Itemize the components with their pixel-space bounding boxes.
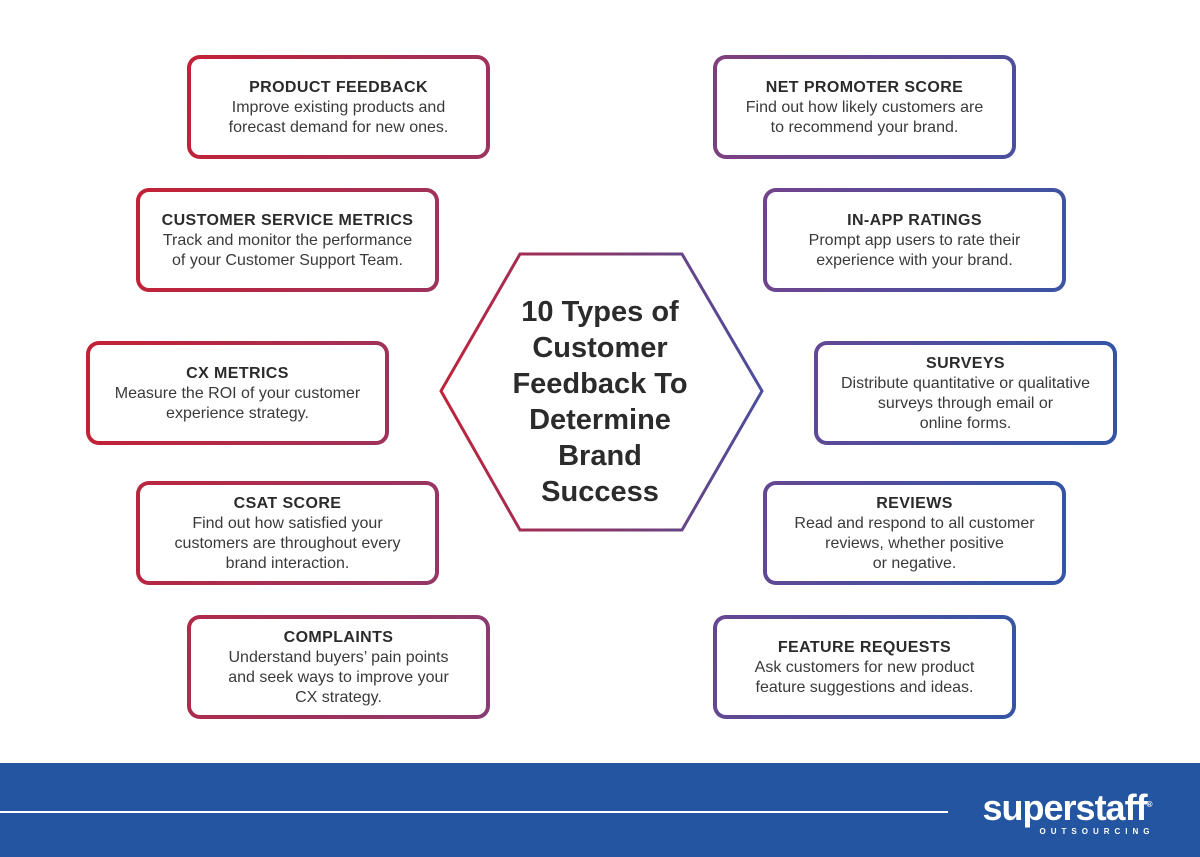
- panel: surveys: SURVEYS: [926, 355, 1005, 372]
- panel: customer service metrics: of your Customer Support Team.: [172, 252, 403, 269]
- panel: net promoter score: to recommend your brand.: [771, 119, 958, 136]
- panel: cx metrics: experience strategy.: [166, 405, 309, 422]
- panel: csat score: customers are throughout every: [175, 535, 400, 552]
- panel: product feedback: PRODUCT FEEDBACK: [249, 79, 428, 96]
- panel: cx metrics: [86, 341, 389, 445]
- panel: product feedback: [187, 55, 490, 159]
- panel: surveys: online forms.: [920, 415, 1011, 432]
- panel: net promoter score: [713, 55, 1016, 159]
- panel: product feedback: Improve existing products and: [232, 99, 445, 116]
- hexagon title: Determine: [529, 404, 671, 436]
- panel: feature requests: FEATURE REQUESTS: [778, 639, 951, 656]
- hexagon title: Customer: [532, 332, 668, 364]
- panel: csat score: brand interaction.: [226, 555, 349, 572]
- panel: surveys: surveys through email or: [878, 395, 1053, 412]
- panel: csat score: Find out how satisfied your: [192, 515, 383, 532]
- panel: cx metrics: CX METRICS: [186, 365, 289, 382]
- panel: in-app ratings: [763, 188, 1066, 292]
- panel: net promoter score: NET PROMOTER SCORE: [766, 79, 963, 96]
- hexagon title: Feedback To: [512, 368, 688, 400]
- panel: net promoter score: Find out how likely customers are: [746, 99, 983, 116]
- panel: customer service metrics: [136, 188, 439, 292]
- panel: csat score: CSAT SCORE: [234, 495, 341, 512]
- hexagon title: Brand: [558, 440, 642, 472]
- hexagon title: 10 Types of: [521, 296, 679, 328]
- panel: customer service metrics: CUSTOMER SERVICE METRICS: [162, 212, 413, 229]
- panel: complaints: CX strategy.: [295, 689, 382, 706]
- footer band: [0, 763, 1200, 857]
- panel: csat score: [136, 481, 439, 585]
- panel: in-app ratings: IN-APP RATINGS: [847, 212, 982, 229]
- panel: feature requests: [713, 615, 1016, 719]
- panel: in-app ratings: Prompt app users to rate their: [809, 232, 1020, 249]
- panel: reviews: or negative.: [873, 555, 956, 572]
- panel: feature requests: Ask customers for new product: [755, 659, 974, 676]
- logo: OUTSOURCING: [1040, 827, 1154, 836]
- panel: reviews: [763, 481, 1066, 585]
- panel: complaints: [187, 615, 490, 719]
- panel: reviews: Read and respond to all customer: [794, 515, 1035, 532]
- panel: reviews: reviews, whether positive: [825, 535, 1004, 552]
- panel: complaints: and seek ways to improve your: [228, 669, 449, 686]
- hexagon title: Success: [541, 476, 659, 508]
- panel: product feedback: forecast demand for new ones.: [229, 119, 448, 136]
- panel: complaints: Understand buyers’ pain points: [228, 649, 448, 666]
- panel: in-app ratings: experience with your brand.: [816, 252, 1013, 269]
- panel: customer service metrics: Track and monitor the performance: [163, 232, 412, 249]
- panel: reviews: REVIEWS: [876, 495, 953, 512]
- panel: complaints: COMPLAINTS: [284, 629, 393, 646]
- logo: superstaff®: [983, 787, 1151, 828]
- panel: cx metrics: Measure the ROI of your customer: [115, 385, 360, 402]
- panel: feature requests: feature suggestions and ideas.: [756, 679, 973, 696]
- panel: surveys: [814, 341, 1117, 445]
- panel: surveys: Distribute quantitative or qualitative: [841, 375, 1090, 392]
